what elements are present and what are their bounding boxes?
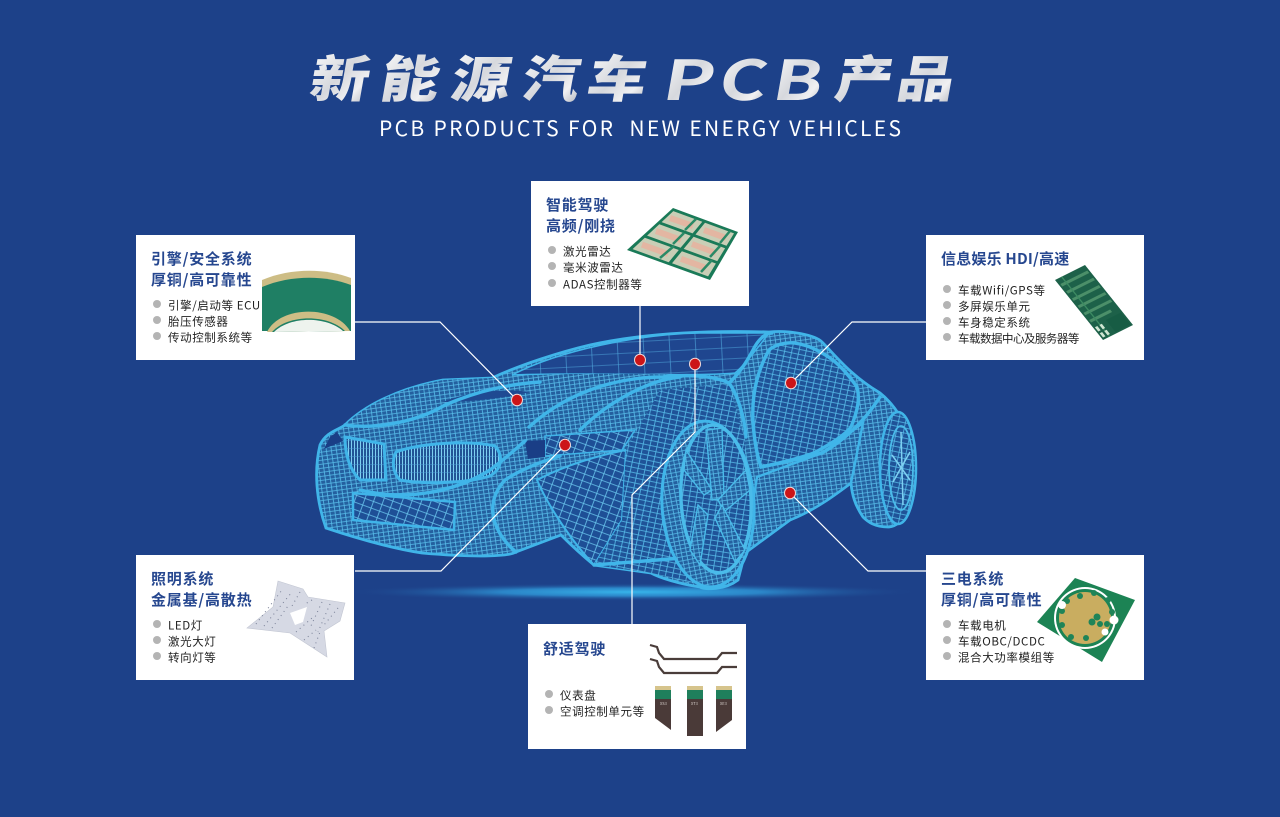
list bbox=[943, 282, 1080, 346]
highlighted body creases bbox=[345, 333, 880, 565]
icon: flexible circuit strips: XE3 bbox=[720, 701, 727, 707]
nose corner accent bbox=[324, 432, 343, 449]
list: 胎压传感器 bbox=[168, 314, 228, 330]
icon: rigid-flex pcb panel bbox=[627, 208, 738, 280]
heading: 厚铜/高可靠性 bbox=[151, 269, 252, 290]
title: 品 bbox=[892, 39, 962, 112]
list: 仪表盘 bbox=[560, 688, 596, 704]
red marker dots bbox=[512, 354, 796, 499]
list: 车身稳定系统 bbox=[958, 314, 1031, 330]
title: B bbox=[768, 36, 831, 116]
title: 能 bbox=[375, 39, 447, 112]
panel: three-electric system bbox=[926, 555, 1144, 680]
list bbox=[548, 244, 642, 292]
connector lines bbox=[355, 305, 926, 624]
heading: 金属基/高散热 bbox=[151, 589, 252, 610]
panel: infotainment bbox=[926, 235, 1144, 360]
heading bbox=[546, 194, 616, 236]
heading: 照明系统 bbox=[151, 568, 214, 589]
front left grille bbox=[345, 437, 386, 480]
list: 车载OBC/DCDC bbox=[958, 634, 1045, 650]
list: LED灯 bbox=[168, 618, 203, 634]
title: 汽 bbox=[517, 39, 587, 112]
panel: lighting system bbox=[136, 555, 354, 680]
heading bbox=[151, 248, 252, 290]
list: 车载Wifi/GPS等 bbox=[958, 282, 1046, 298]
subtitle: PCB PRODUCTS FOR NEW ENERGY VEHICLES bbox=[379, 113, 901, 143]
list: 多屏娱乐单元 bbox=[958, 298, 1031, 314]
heading bbox=[151, 568, 252, 610]
wheel arch panel bbox=[594, 384, 745, 585]
windshield bbox=[512, 333, 769, 375]
title: 车 bbox=[582, 39, 654, 112]
title: C bbox=[714, 36, 775, 116]
panel: comfort driving bbox=[528, 624, 746, 749]
icon: flexible circuit strips bbox=[655, 686, 732, 736]
list bbox=[153, 618, 216, 666]
icon: heavy copper pcb bbox=[1037, 578, 1135, 662]
title: 源 bbox=[446, 39, 518, 112]
title: 产 bbox=[830, 39, 900, 112]
heading: 厚铜/高可靠性 bbox=[941, 589, 1042, 610]
list bbox=[545, 688, 645, 720]
list: 引擎/启动等 ECU bbox=[168, 298, 261, 314]
title: P bbox=[657, 37, 723, 116]
list: 车载数据中心及服务器等 bbox=[958, 330, 1080, 346]
hood bbox=[345, 374, 700, 440]
panel: intelligent driving bbox=[531, 181, 749, 306]
rocker panel bbox=[745, 423, 863, 553]
icon: thick copper ring pcb bbox=[262, 271, 351, 332]
list: 转向灯等 bbox=[168, 650, 216, 666]
icon: flexible circuit strips: XT3 bbox=[691, 701, 698, 707]
panel: engine and safety systems bbox=[136, 235, 355, 360]
list: 传动控制系统等 bbox=[168, 330, 253, 346]
rear wheel bbox=[880, 412, 916, 524]
car body silhouette bbox=[317, 332, 915, 589]
title bbox=[304, 36, 963, 116]
list bbox=[943, 618, 1055, 666]
heading: 信息娱乐 HDI/高速 bbox=[941, 248, 1069, 269]
title: 新 bbox=[305, 39, 377, 112]
list: 激光大灯 bbox=[168, 634, 216, 650]
hood vent bbox=[443, 390, 530, 402]
wireframe car bbox=[317, 332, 916, 589]
icon: flexible circuit traces bbox=[650, 645, 737, 673]
list: 车载电机 bbox=[958, 618, 1006, 634]
list: 混合大功率模组等 bbox=[958, 650, 1055, 666]
list: 激光雷达 bbox=[563, 244, 611, 260]
heading bbox=[941, 568, 1042, 610]
floor glow bbox=[342, 583, 922, 601]
front right grille bbox=[393, 443, 500, 483]
dark headlight recess bbox=[525, 440, 545, 459]
lower intake bbox=[353, 493, 455, 530]
icon: metal-core led board bbox=[247, 581, 345, 657]
list: 毫米波雷达 bbox=[563, 260, 624, 276]
door and side glass bbox=[753, 343, 858, 467]
list: ADAS控制器等 bbox=[563, 276, 642, 292]
list: 空调控制单元等 bbox=[560, 704, 645, 720]
icon: flexible circuit strips: XS3 bbox=[660, 701, 667, 707]
front air curtain panel bbox=[537, 450, 626, 565]
icon: hdi pcb board bbox=[1055, 265, 1133, 340]
heading: 智能驾驶 bbox=[546, 194, 609, 215]
list bbox=[153, 298, 261, 346]
heading: 舒适驾驶 bbox=[543, 638, 606, 659]
heading: 高频/刚挠 bbox=[546, 215, 616, 236]
headlight bbox=[545, 430, 635, 456]
front wheel bbox=[658, 419, 758, 589]
heading: 三电系统 bbox=[941, 568, 1004, 589]
wheel spokes bbox=[684, 428, 750, 565]
heading: 引擎/安全系统 bbox=[151, 248, 252, 269]
